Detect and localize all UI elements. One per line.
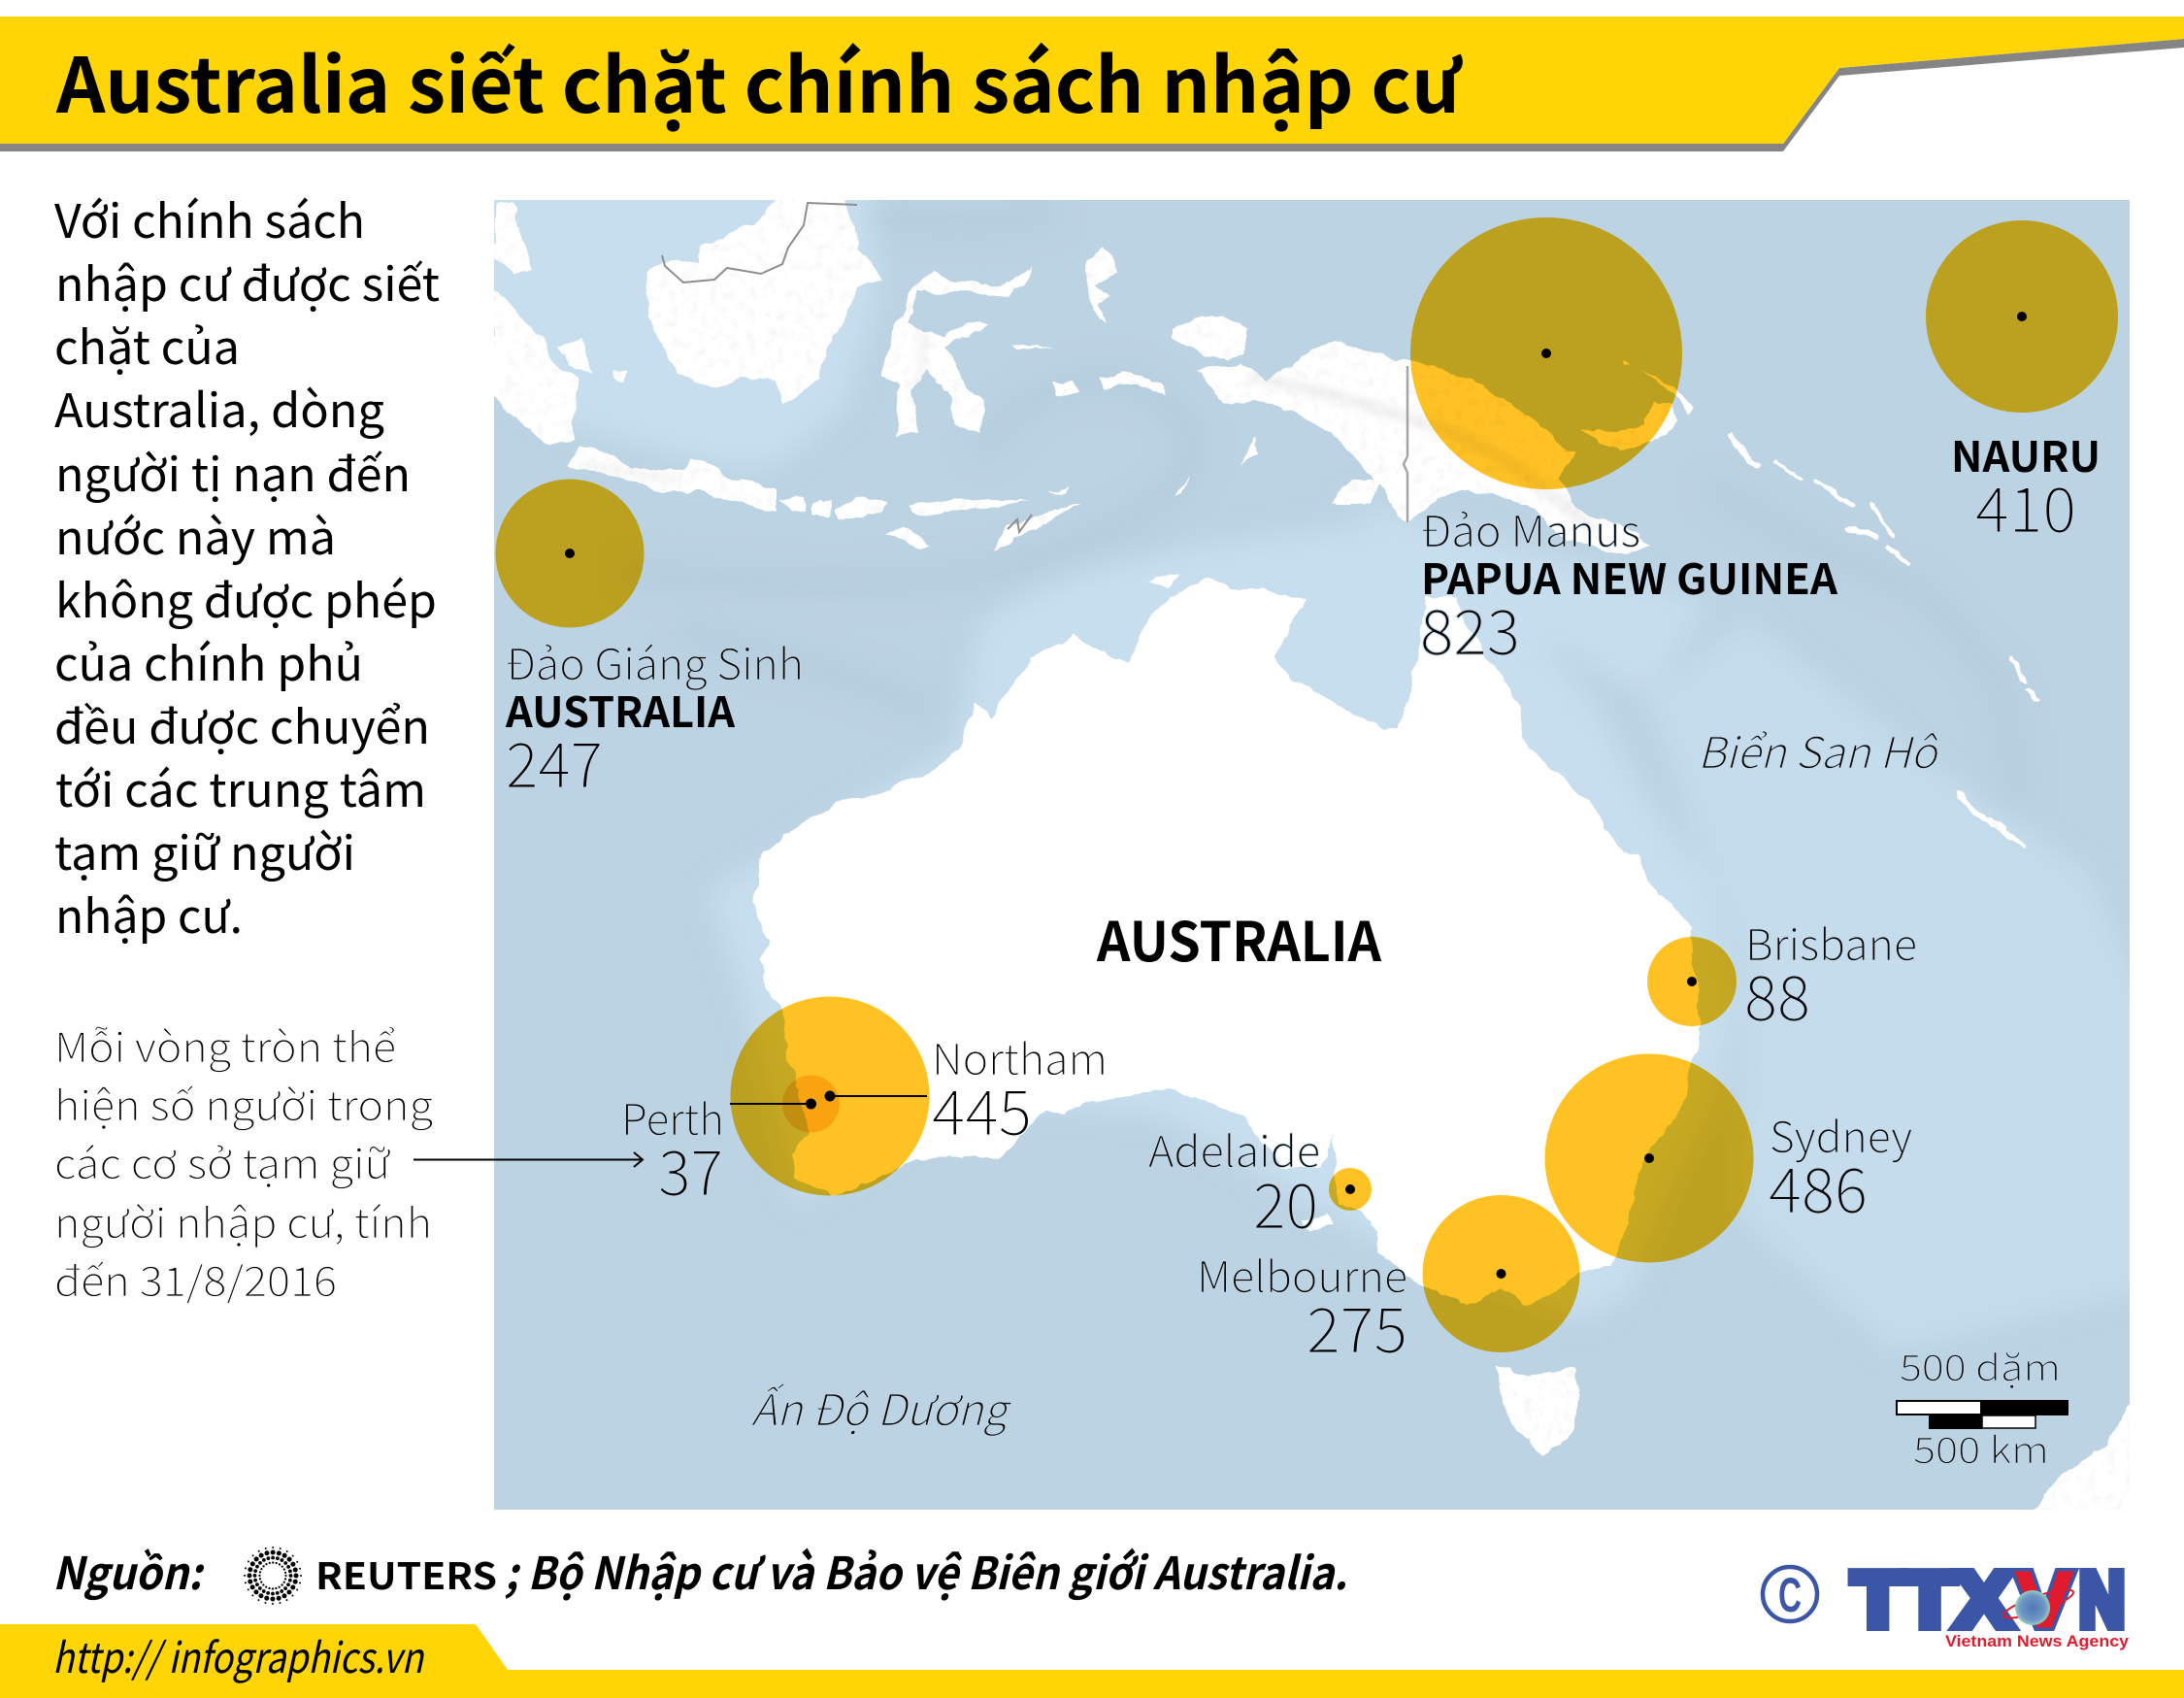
- scale bar: 500 dặm: [1900, 1339, 2061, 1391]
- label: Nauru: 410: [1975, 461, 2076, 550]
- bubble: Brisbane: [1647, 937, 1737, 1026]
- label: Australia: AUSTRALIA: [1096, 899, 1382, 978]
- label: Sydney: [1769, 1103, 1912, 1231]
- intro text block: nước này mà: [55, 500, 336, 568]
- label: Brisbane: [1744, 911, 1917, 1039]
- source line: Nguồn:: [52, 1539, 205, 1603]
- label: Manus Island: [1420, 497, 1837, 673]
- intro text block: [54, 183, 440, 947]
- label: Melbourne: Melbourne: [1197, 1243, 1407, 1305]
- icon: copyright mark: [1763, 1567, 1817, 1622]
- label: Indian Ocean: Ấn Độ Dương: [751, 1376, 1011, 1438]
- logo: TTXVN: Vietnam News Agency: [1945, 1633, 2130, 1650]
- intro text block: của chính phủ: [54, 626, 363, 694]
- bubble: Manus Island: [1410, 217, 1682, 489]
- label: Melbourne: 275: [1307, 1282, 1407, 1371]
- logo: TTXVN: [1852, 1556, 2130, 1650]
- intro text block: đều được chuyển: [54, 689, 430, 757]
- label: Sydney: 486: [1769, 1142, 1868, 1231]
- label: Perth: Perth: [621, 1085, 724, 1148]
- footer url: http:// infographics.vn: [52, 1625, 425, 1685]
- bubble: Adelaide: [1329, 1168, 1372, 1211]
- intro text block: chặt của: [54, 310, 240, 378]
- label: Perth: [621, 1085, 724, 1214]
- label: Perth: 37: [658, 1124, 723, 1214]
- sea: [466, 175, 2174, 1510]
- label: Nauru: NAURU: [1951, 424, 2101, 484]
- source line: REUTERS: [315, 1547, 497, 1600]
- icon: globe and orbit: [2001, 1584, 2076, 1625]
- bubble: Melbourne: [1423, 1195, 1580, 1352]
- intro text block: người tị nạn đến: [55, 437, 411, 505]
- bubble: Sydney: [1545, 1054, 1753, 1262]
- label: Coral Sea: Biển San Hô: [1698, 718, 1939, 781]
- logo: TTXVN: V: [2016, 1556, 2072, 1643]
- bubble: Christmas Island: [495, 480, 645, 627]
- intro text block: Với chính sách: [54, 183, 365, 251]
- intro text block: Australia, dòng: [54, 373, 384, 441]
- land: islands: [494, 199, 2139, 1515]
- label: Adelaide: [1148, 1117, 1320, 1247]
- intro text block: không được phép: [55, 563, 437, 631]
- location dots and leaders: [565, 312, 2027, 1279]
- label: Adelaide: Adelaide: [1148, 1117, 1320, 1180]
- label: Northam: [932, 1025, 1108, 1153]
- land: Australia: [754, 575, 1701, 1307]
- source line: ; Bộ Nhập cư và Bảo vệ Biên giới Australia.: [505, 1539, 1347, 1603]
- label: Christmas Island: Đảo Giáng Sinh: [506, 630, 804, 692]
- icon: Reuters dotted logo: [245, 1548, 301, 1604]
- label: Brisbane: 88: [1744, 949, 1810, 1039]
- label: Melbourne: [1197, 1243, 1407, 1371]
- title: Australia siết chặt chính sách nhập cư: [55, 26, 1463, 135]
- bubble: Perth: [782, 1076, 840, 1132]
- intro text block: nhập cư được siết: [55, 247, 440, 315]
- scale bar: [1897, 1339, 2068, 1474]
- title banner: [0, 17, 2184, 151]
- label: Northam: Northam: [932, 1025, 1108, 1087]
- panel: map: [466, 175, 2174, 1515]
- note text block: hiện số người trong: [54, 1074, 433, 1133]
- note text block: các cơ sở tạm giữ: [54, 1132, 390, 1191]
- source line: [52, 1539, 1347, 1604]
- bubbles: [495, 217, 2118, 1352]
- arrow: note to Perth bubble: [414, 1152, 643, 1167]
- label: Nauru: [1951, 424, 2101, 550]
- borders: [662, 203, 1407, 532]
- label: Christmas Island: AUSTRALIA: [505, 680, 735, 740]
- note text block: [54, 1015, 433, 1309]
- land texture: [494, 200, 2130, 1510]
- icon: copyright mark: C: [1778, 1568, 1802, 1622]
- intro text block: nhập cư.: [55, 879, 243, 947]
- label: Sydney: Sydney: [1770, 1103, 1912, 1165]
- note text block: người nhập cư, tính: [54, 1191, 432, 1250]
- label: Adelaide: 20: [1253, 1157, 1318, 1247]
- footer band: [0, 1624, 2184, 1698]
- label: Christmas Island: 247: [506, 716, 603, 806]
- label: Manus Island: 823: [1420, 583, 1520, 673]
- bubble: Northam: [730, 996, 930, 1196]
- logo: TTXVN: V: [2016, 1556, 2072, 1643]
- intro text block: tới các trung tâm: [55, 752, 426, 820]
- note text block: đến 31/8/2016: [54, 1249, 337, 1309]
- intro text block: tạm giữ người: [54, 816, 355, 883]
- logo: TTXVN: N: [2079, 1556, 2125, 1643]
- label: Brisbane: Brisbane: [1745, 911, 1917, 973]
- note text block: Mỗi vòng tròn thể: [54, 1015, 396, 1075]
- bubble: Nauru: [1926, 220, 2118, 413]
- label: Northam: 445: [932, 1064, 1032, 1153]
- label: Manus Island: Đảo Manus: [1421, 497, 1640, 559]
- label: Christmas Island: [505, 630, 804, 806]
- logo: TTXVN: TTX: [1852, 1556, 2012, 1643]
- scale bar: 500 km: [1913, 1421, 2049, 1474]
- label: Manus Island: PAPUA NEW GUINEA: [1421, 547, 1837, 607]
